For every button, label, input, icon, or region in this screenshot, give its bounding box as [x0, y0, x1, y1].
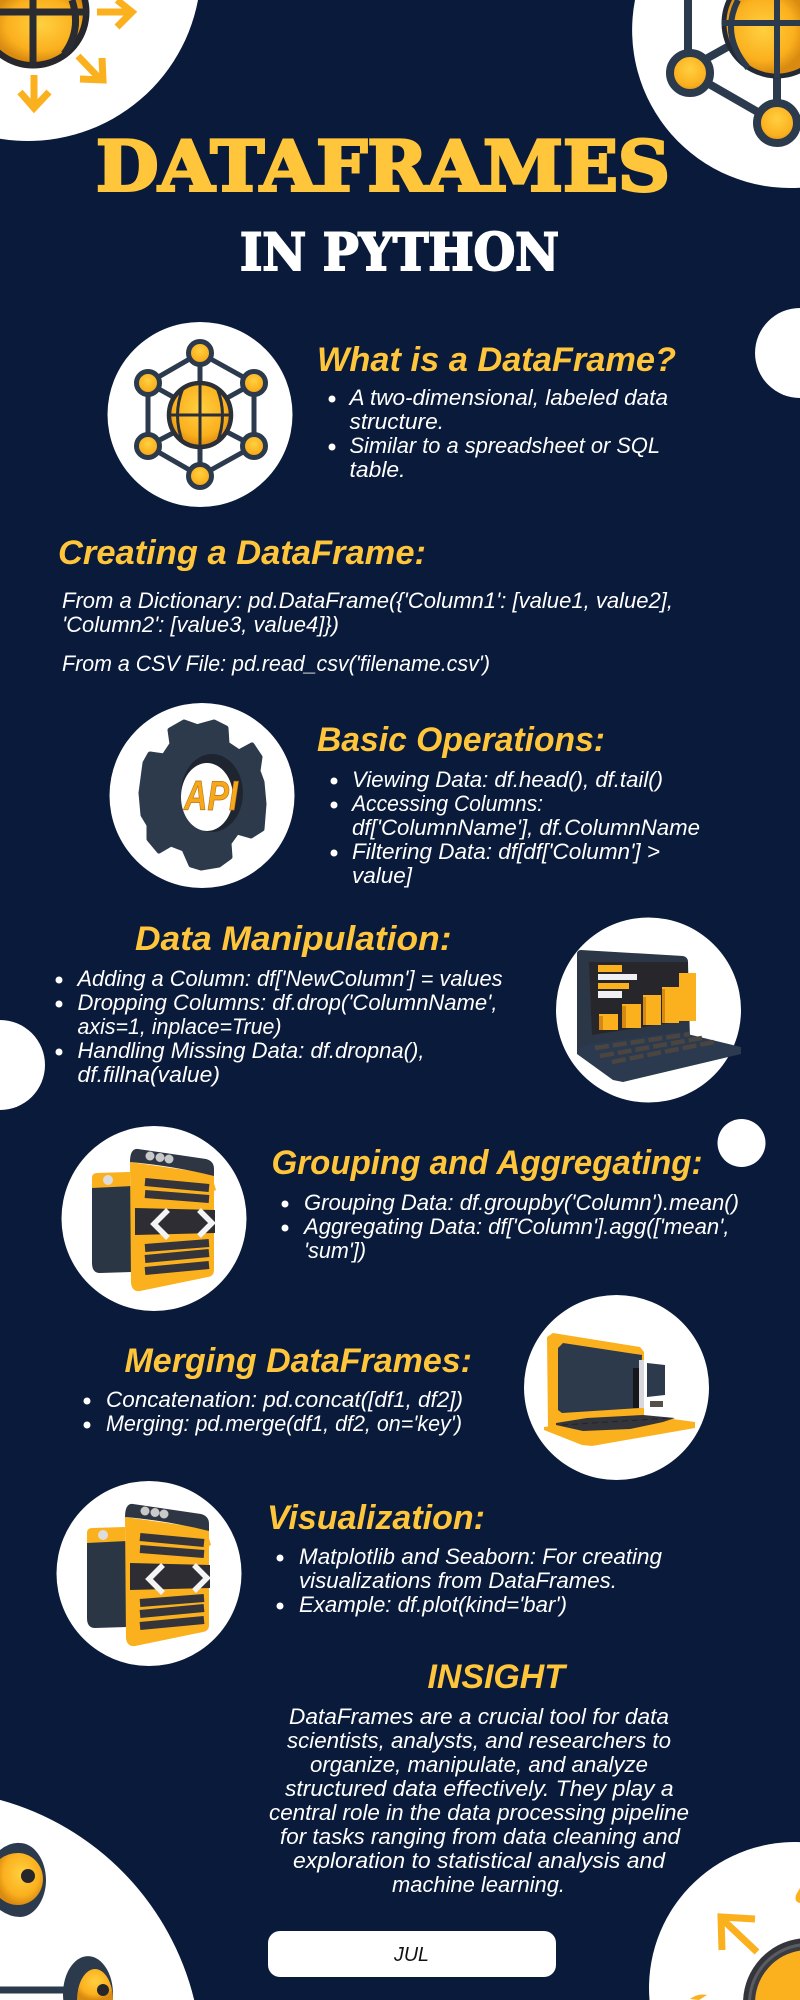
- icon: web window: [56, 1481, 242, 1666]
- heading: Creating a DataFrame:: [58, 534, 426, 572]
- text block: From a Dictionary: pd.DataFrame({'Column1': [value1, value2],: [62, 588, 673, 613]
- panel: merging dataframes: [84, 1295, 709, 1480]
- bullet list: visualizations from DataFrames.: [299, 1568, 617, 1593]
- paragraph: organize, manipulate, and analyze: [310, 1752, 648, 1777]
- bullet list: Adding a Column: df['NewColumn'] = values: [76, 966, 503, 991]
- bullet list: Accessing Columns:: [350, 791, 543, 816]
- heading: Grouping and Aggregating:: [272, 1144, 702, 1182]
- icon: API gear: [110, 703, 294, 888]
- button: author label: [268, 1931, 556, 1977]
- bullet list: [282, 1190, 739, 1263]
- panel: insight: [269, 1658, 689, 1897]
- bullet list: Example: df.plot(kind='bar'): [299, 1592, 567, 1617]
- bullet list: Dropping Columns: df.drop('ColumnName',: [78, 990, 498, 1015]
- bullet list: df['ColumnName'], df.ColumnName: [352, 815, 700, 840]
- subtitle: IN PYTHON: [240, 223, 559, 283]
- heading: What is a DataFrame?: [317, 341, 676, 379]
- bullet list: structure.: [350, 409, 444, 434]
- panel: visualization: [56, 1481, 662, 1666]
- icon: API gear: API: [183, 772, 239, 819]
- icon: laptop with bar chart: [556, 918, 741, 1102]
- bullet list: Matplotlib and Seaborn: For creating: [299, 1544, 662, 1569]
- bullet list: [84, 1387, 463, 1436]
- paragraph: central role in the data processing pipeline: [269, 1800, 689, 1825]
- paragraph: machine learning.: [392, 1872, 565, 1897]
- icon: connector nodes: [0, 1843, 113, 2000]
- icon: globe network top right: [670, 0, 800, 143]
- paragraph: exploration to statistical analysis and: [293, 1848, 667, 1873]
- title: DATAFRAMES: [96, 126, 670, 208]
- icon: web window: [62, 1126, 246, 1311]
- decorative circle: top right: [632, 0, 800, 188]
- title: [96, 126, 670, 283]
- bullet list: [276, 1544, 662, 1617]
- paragraph: DataFrames are a crucial tool for data: [289, 1704, 669, 1729]
- paragraph: structured data effectively. They play a: [285, 1776, 674, 1801]
- bullet list: Aggregating Data: df['Column'].agg(['mean',: [302, 1214, 730, 1239]
- bullet list: Handling Missing Data: df.dropna(),: [78, 1038, 424, 1063]
- paragraph: [269, 1704, 689, 1897]
- decorative circle: left: [0, 1020, 45, 1110]
- button: author label: JUL: [393, 1944, 429, 1966]
- heading: INSIGHT: [428, 1658, 568, 1696]
- icon: yellow computer: [524, 1295, 709, 1480]
- bullet list: 'sum']): [304, 1238, 366, 1263]
- bullet list: Concatenation: pd.concat([df1, df2]): [106, 1387, 463, 1412]
- bullet list: [56, 966, 502, 1087]
- bullet list: value]: [352, 863, 413, 888]
- decorative circle: right: [755, 308, 800, 398]
- decorative circle: bottom left: [0, 1800, 194, 2000]
- heading: Basic Operations:: [317, 721, 605, 759]
- bullet list: table.: [350, 457, 406, 482]
- text block: [62, 588, 673, 676]
- bullet list: A two-dimensional, labeled data: [347, 385, 668, 410]
- text block: 'Column2': [value3, value4]}): [62, 612, 339, 637]
- bullet list: Merging: pd.merge(df1, df2, on='key'): [106, 1411, 462, 1436]
- paragraph: for tasks ranging from data cleaning and: [280, 1824, 681, 1849]
- heading: Visualization:: [267, 1499, 485, 1537]
- heading: Merging DataFrames:: [124, 1342, 472, 1380]
- bullet list: Viewing Data: df.head(), df.tail(): [352, 767, 663, 792]
- text block: From a CSV File: pd.read_csv('filename.csv'): [62, 651, 490, 676]
- panel: basic operations: [110, 703, 700, 888]
- panel: what is a dataframe: [108, 322, 676, 507]
- icon: globe with arrows bottom: [690, 1888, 800, 2000]
- icon: globe with arrows: [0, 0, 132, 108]
- bullet list: [328, 385, 668, 482]
- bullet list: df.fillna(value): [78, 1062, 220, 1087]
- decorative circle: bottom right: [649, 1842, 800, 2000]
- bullet list: Grouping Data: df.groupby('Column').mean(): [304, 1190, 739, 1215]
- paragraph: scientists, analysts, and researchers to: [287, 1728, 671, 1753]
- panel: data manipulation: [56, 918, 741, 1102]
- panel: creating a dataframe: [58, 534, 673, 676]
- bullet list: axis=1, inplace=True): [78, 1014, 282, 1039]
- bullet list: [330, 767, 700, 888]
- icon: molecule globe: [108, 322, 292, 507]
- decorative circle: small right: [718, 1119, 766, 1167]
- decorative circle: top left: [0, 0, 198, 141]
- heading: Data Manipulation:: [135, 920, 452, 958]
- bullet list: Filtering Data: df[df['Column'] >: [352, 839, 660, 864]
- bullet list: Similar to a spreadsheet or SQL: [350, 433, 660, 458]
- panel: grouping and aggregating: [62, 1126, 739, 1311]
